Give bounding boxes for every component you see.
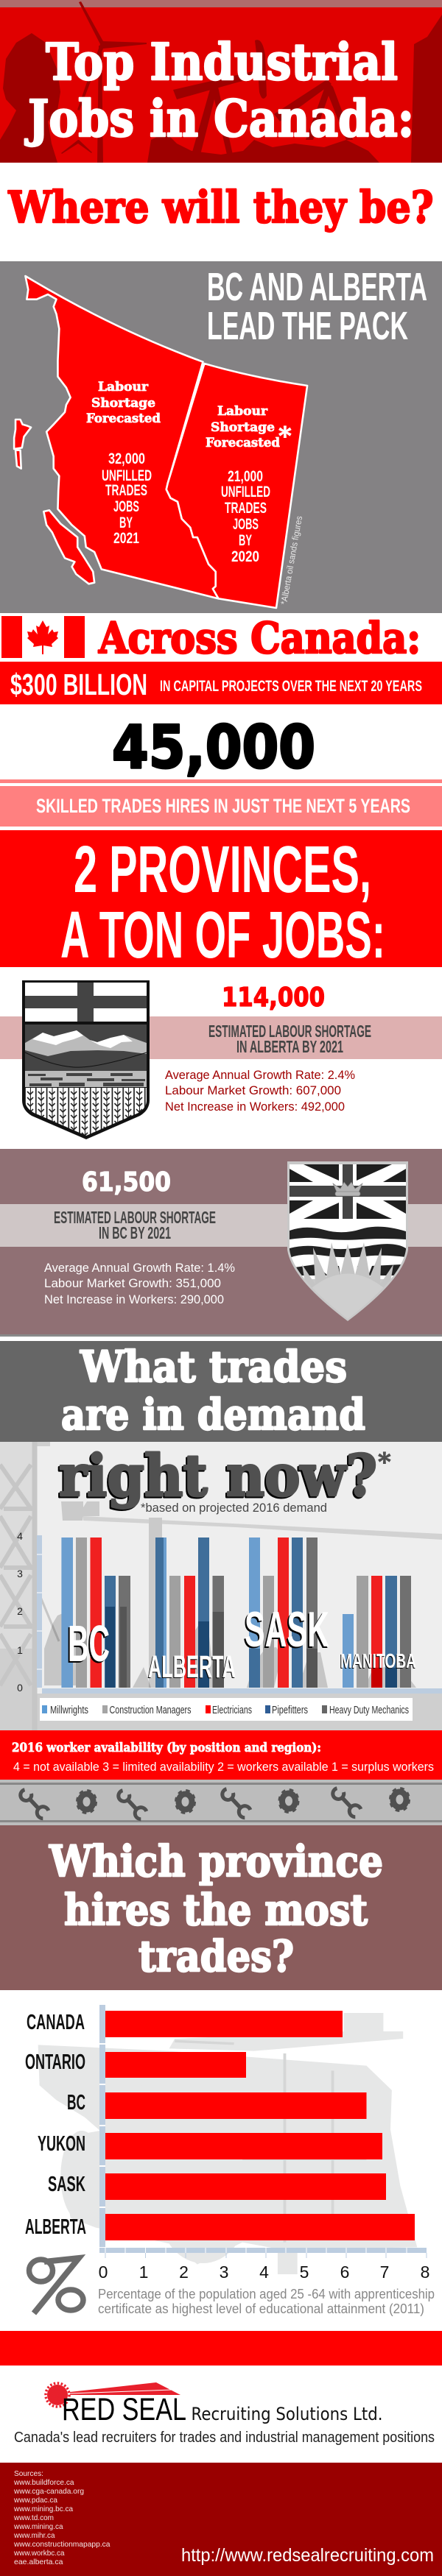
row: Yukon (38, 2132, 382, 2159)
sources list: www.mihr.ca (13, 2531, 55, 2540)
heading panel: which province hires the most trades: hires the most (64, 1885, 368, 1935)
Alberta forecast label: 2020 (231, 548, 259, 565)
panel: header (0, 0, 442, 163)
background: crane silhouette (0, 1442, 59, 1730)
BC statistics: Labour Market Growth: 351,000 (44, 1276, 221, 1290)
panel: BC and Alberta lead the pack (0, 261, 442, 613)
x axis: 6 (340, 2262, 349, 2282)
BC statistics: Net Increase in Workers: 290,000 (44, 1292, 224, 1306)
row: BC: BC (67, 2091, 85, 2115)
BC statistics: Average Annual Growth Rate: 1.4% (44, 1261, 235, 1275)
heading: right now: * (378, 1448, 391, 1477)
province labels: ALBERTA (147, 1650, 235, 1685)
BC shortage label: IN BC BY 2021 (99, 1223, 171, 1242)
heading panel: what trades are in demand: are in demand (61, 1390, 365, 1440)
x axis: 5 (300, 2262, 309, 2282)
Alberta forecast label (206, 404, 292, 565)
panel: British Columbia (0, 1149, 442, 1334)
Alberta forecast label: UNFILLED (221, 484, 270, 500)
heading: right now: right now? (59, 1443, 377, 1510)
BC forecast label: 32,000 (108, 450, 145, 467)
Alberta forecast label: BY (239, 532, 252, 549)
heading panel: what trades are in demand: What trades (80, 1342, 347, 1392)
sources list: Sources: (14, 2469, 43, 2478)
row: Alberta: ALBERTA (25, 2215, 86, 2239)
y axis: 1 (17, 1644, 23, 1656)
x axis: 8 (421, 2262, 429, 2282)
sources list: www.constructionmapapp.ca (13, 2540, 110, 2549)
BC statistics (44, 1261, 235, 1306)
title: Top Industrial (46, 33, 398, 92)
company name: RED SEAL (62, 2392, 186, 2427)
heading panel: which province hires the most trades: Which province (49, 1836, 383, 1886)
panel: tools icon strip (0, 1780, 442, 1825)
y axis (99, 2005, 105, 2247)
Alberta forecast label: 21,000 (228, 468, 263, 485)
heading: right now: right now? (57, 1444, 376, 1511)
y axis: 3 (17, 1568, 23, 1579)
x axis: 4 (259, 2262, 269, 2282)
heading panel: what trades are in demand (0, 1334, 442, 1442)
icon: red seal logo mark (46, 2382, 180, 2407)
big number: 61,500: 61,500 (82, 1167, 171, 1197)
sources list: www.mining.ca (13, 2522, 63, 2531)
row: Alberta (25, 2214, 415, 2240)
x axis (99, 2248, 429, 2282)
sources list (13, 2469, 110, 2566)
legend: Heavy Duty Mechanics (329, 1704, 409, 1716)
website URL: http://www.redsealrecruiting.com (181, 2545, 434, 2566)
BC forecast label: Forecasted (86, 411, 161, 426)
icon: BC coat of arms (287, 1161, 408, 1321)
y axis: 0 (17, 1682, 23, 1694)
panel: apprenticeship bar chart (0, 1990, 442, 2331)
panel: Alberta (0, 980, 442, 1139)
x axis: 3 (220, 2262, 228, 2282)
row: Canada: CANADA (27, 2011, 85, 2034)
Alberta forecast label: * (278, 422, 292, 451)
map: BC and Alberta (14, 276, 307, 608)
row: Ontario: ONTARIO (25, 2050, 85, 2074)
legend (40, 1698, 413, 1721)
icons: wrenches and gears (21, 1788, 409, 1819)
red divider band (0, 2331, 442, 2366)
y axis (17, 1530, 42, 1694)
sources list: www.td.com (13, 2513, 54, 2522)
Alberta shortage label: IN ALBERTA BY 2021 (236, 1037, 343, 1056)
legend: Pipefitters (272, 1704, 308, 1716)
BC forecast label: Labour (98, 380, 149, 394)
row: Canada (27, 2011, 343, 2037)
row: Sask: SASK (48, 2173, 85, 2196)
caption (98, 2287, 435, 2316)
legend: Millwrights (50, 1704, 88, 1716)
legend: Electricians (212, 1704, 252, 1716)
BC shortage label: ESTIMATED LABOUR SHORTAGE (54, 1208, 216, 1227)
big number: 114,000: 114,000 (222, 983, 325, 1013)
province labels: BC (66, 1616, 108, 1674)
Alberta forecast label: Shortage (211, 420, 275, 435)
header silhouettes of worker, wind turbines and pumpjacks (0, 1, 442, 163)
row: Ontario (25, 2050, 246, 2078)
bar chart: BC (61, 1538, 130, 1688)
BC shortage label (54, 1208, 216, 1242)
sources list: eae.alberta.ca (14, 2558, 63, 2566)
row: Yukon: YUKON (38, 2132, 85, 2156)
x axis (42, 1688, 442, 1694)
x axis: 2 (179, 2262, 189, 2282)
caption: certificate as highest level of educational attainment (2011) (98, 2301, 424, 2316)
title (25, 33, 414, 149)
BC forecast label: 2021 (113, 530, 139, 547)
BC forecast label: JOBS (113, 498, 139, 515)
heading panel: 2 provinces, a ton of jobs (0, 830, 442, 972)
BC forecast label: Shortage (91, 396, 155, 411)
background: worker silhouettes behind bars (44, 1612, 416, 1688)
subtitle (0, 163, 442, 261)
BC forecast label (86, 380, 161, 547)
capital projects banner (0, 662, 442, 704)
BC forecast label: TRADES (105, 482, 147, 499)
legend: Construction Managers (109, 1704, 192, 1716)
capital projects banner: $300 BILLION (10, 668, 147, 701)
BC forecast label: BY (119, 514, 133, 531)
sources list: www.mining.bc.ca (13, 2505, 73, 2513)
heading (207, 265, 427, 348)
panel: worker availability key: 2016 worker availability (by position and region): (12, 1741, 321, 1755)
province labels: SASK (243, 1603, 328, 1659)
province labels (66, 1602, 416, 1685)
icon: percent sign (29, 2258, 83, 2313)
heading panel: which province hires the most trades: trades? (138, 1931, 294, 1981)
skilled trades banner (0, 779, 442, 827)
icon: Alberta coat of arms (22, 980, 150, 1139)
Alberta statistics (165, 1068, 355, 1114)
y axis: 2 (17, 1605, 23, 1617)
Alberta forecast label: JOBS (233, 516, 259, 533)
Alberta forecast label: TRADES (225, 500, 267, 517)
panel: worker availability key (0, 1730, 442, 1780)
big number: 45,000: 45,000 (112, 713, 315, 782)
footnote: based on projected 2016 demand: *based on projected 2016 demand (141, 1501, 327, 1515)
panel: footer (0, 2463, 442, 2576)
province labels: SASK (245, 1602, 329, 1657)
Alberta statistics: Labour Market Growth: 607,000 (165, 1083, 341, 1097)
x axis: 1 (139, 2262, 148, 2282)
x axis: 7 (380, 2262, 389, 2282)
province labels: ALBERTA (148, 1649, 236, 1685)
heading panel: which province hires the most trades (0, 1825, 442, 1990)
sources list: www.buildforce.ca (13, 2478, 74, 2487)
bar chart: Manitoba (343, 1576, 411, 1688)
panel: company logo: Recruiting Solutions Ltd. (192, 2404, 383, 2424)
Alberta statistics: Average Annual Growth Rate: 2.4% (165, 1068, 355, 1082)
Alberta statistics: Net Increase in Workers: 492,000 (165, 1100, 345, 1114)
footnote: Alberta oil sands figures: *Alberta oil sands figures (278, 515, 304, 606)
province labels: BC (68, 1615, 110, 1672)
x axis: 0 (99, 2262, 108, 2282)
row: BC (67, 2091, 367, 2119)
row: Sask (48, 2173, 386, 2200)
bar chart: Saskatchewan (249, 1538, 318, 1688)
BC forecast label: UNFILLED (102, 467, 152, 484)
sources list: www.pdac.ca (13, 2496, 57, 2505)
y axis: 4 (17, 1530, 23, 1542)
bar chart: Alberta (155, 1538, 224, 1688)
Alberta forecast label: Labour (217, 404, 268, 419)
icon: Canadian flag (1, 616, 85, 658)
sources list: www.cga-canada.org (13, 2487, 84, 2496)
background: mining truck silhouette (38, 2013, 417, 2274)
Alberta forecast label: Forecasted (206, 436, 280, 450)
panel: across Canada (0, 613, 442, 827)
Alberta shortage label (208, 1022, 371, 1056)
panel: trades demand chart (0, 1442, 442, 1730)
sources list: www.workbc.ca (13, 2549, 65, 2558)
panel: company logo (14, 2382, 435, 2446)
